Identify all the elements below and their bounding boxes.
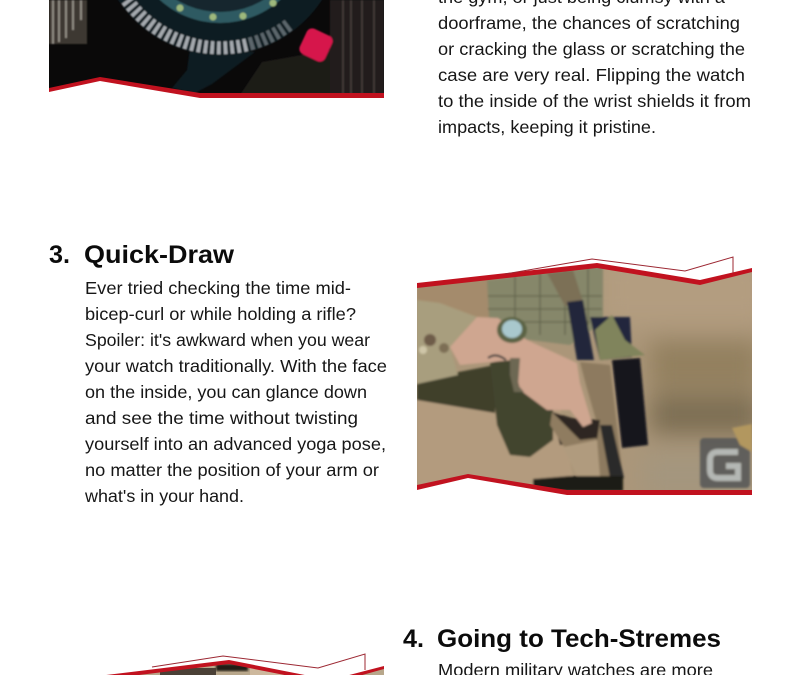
text block: reason 3: on the inside, you can glance down (85, 382, 367, 402)
thin outline: photo 2 (505, 257, 733, 274)
heading: 3. Quick-Draw: Quick-Draw (84, 241, 235, 269)
heading: 3. Quick-Draw: 3. (49, 241, 70, 269)
text block: reason 3: bicep-curl or while holding a rifle? (85, 304, 356, 324)
red edge: photo 1 (49, 77, 384, 98)
photo: reason 4, cropped at page bottom (106, 653, 384, 675)
text block: reason 3: Ever tried checking the time mid- (85, 278, 351, 298)
text block: reason 2: impacts, keeping it pristine. (438, 117, 656, 137)
text block: reason 3 (84, 278, 387, 506)
text block: reason 3: your watch traditionally. With the face (85, 356, 387, 376)
photo: soldier with rifle and inward-facing watch (417, 255, 770, 500)
red edge: photo 2 bottom (417, 474, 752, 495)
text block: reason 2: to the inside of the wrist shields it from (438, 91, 751, 111)
text block: reason 2: doorframe, the chances of scratching (438, 13, 740, 33)
text block: reason 2: case are very real. Flipping the watch (438, 65, 745, 85)
text block: reason 2 (438, 0, 751, 137)
red edge: photo 3 top (49, 660, 384, 675)
heading: 4. Going to Tech-Stremes: Going to Tech-Stremes (437, 625, 721, 653)
text block: reason 3: what's in your hand. (84, 486, 244, 506)
text block: reason 3: yourself into an advanced yoga pose, (85, 434, 386, 454)
text block: reason 3: no matter the position of your arm or (85, 460, 379, 480)
text block: reason 3: Spoiler: it's awkward when you wear (85, 330, 370, 350)
photo: watch on dark wood (49, 0, 384, 100)
text block: reason 2: or cracking the glass or scratching the (438, 39, 745, 59)
thin outline: photo 3 (152, 654, 365, 670)
red edge: photo 2 top (417, 263, 752, 288)
text block: reason 3: and see the time without twisting (85, 408, 358, 428)
heading: 4. Going to Tech-Stremes: 4. (403, 625, 424, 653)
